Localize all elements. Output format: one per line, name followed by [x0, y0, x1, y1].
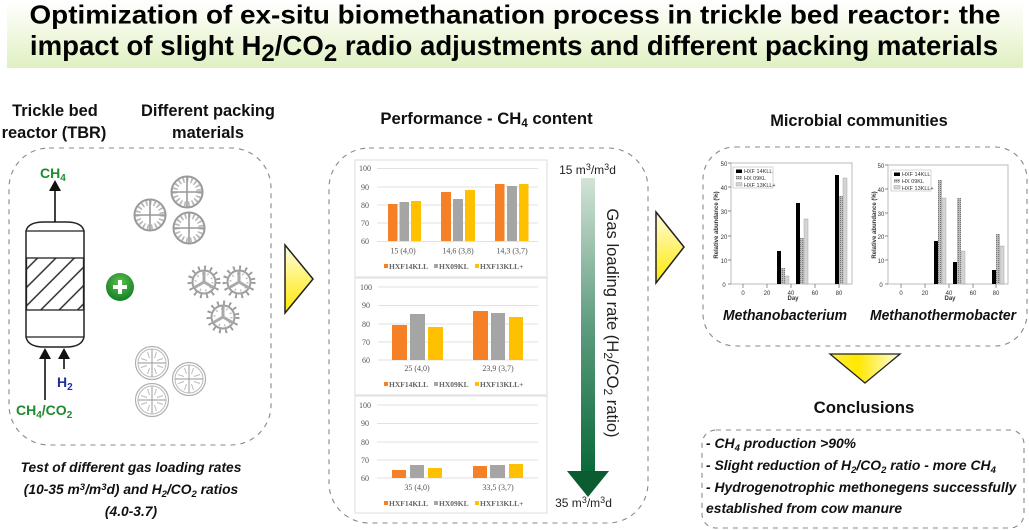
- bar chart: 15 m3/m3d: 15 (4,0): [390, 246, 416, 256]
- text: test description: /m: [84, 482, 101, 497]
- text: test description: ratios: [197, 482, 239, 497]
- label: Methanobacterium: Methanobacterium: [723, 307, 847, 324]
- label: H2 in: H: [57, 374, 67, 390]
- bar chart: 25 m3/m3d: HX09KL: [439, 380, 469, 389]
- label: gas loading rate axis: Gas loading rate (H: [603, 208, 622, 352]
- bar chart: Methanothermobacter: HXF 13KLL+: [902, 186, 934, 192]
- icon: trickle bed reactor: [26, 180, 84, 400]
- bar chart: 35 m3/m3d: HX09KL: [439, 499, 469, 508]
- text: test description: 3: [80, 482, 86, 493]
- title banner: /CO: [275, 30, 324, 61]
- label: CH4/CO2 in: /CO: [42, 402, 67, 418]
- bar chart: 25 m3/m3d: 60: [362, 356, 370, 365]
- heading: conclusions: Conclusions: [814, 398, 914, 417]
- arrow: to performance: [285, 245, 313, 313]
- text: test description: (4.0-3.7): [105, 504, 157, 519]
- conclusion: methanogens: - Hydrogenotrophic methonegens successfully: [706, 479, 1016, 495]
- bar chart: 35 m3/m3d: [355, 396, 547, 513]
- bar chart: Methanothermobacter: 0: [899, 291, 903, 297]
- bar chart: Methanobacterium: 0: [722, 283, 726, 289]
- conclusion: ratio: 2: [880, 465, 887, 476]
- bar chart: 35 m3/m3d: HXF14KLL: [389, 499, 428, 508]
- label: CH4/CO2 in: 2: [67, 410, 73, 421]
- bar chart: 15 m3/m3d: [355, 160, 547, 277]
- bar chart: 35 m3/m3d: 33,5 (3,7): [482, 483, 514, 492]
- text: test description: 2: [161, 489, 168, 500]
- bar chart: 35 m3/m3d: 35 (4,0): [404, 483, 430, 492]
- panel: reactor and packing: [9, 148, 271, 445]
- bar chart: 35 m3/m3d: 60: [361, 474, 369, 483]
- bar chart: Methanothermobacter: 40: [946, 291, 953, 297]
- text: test description: 2: [190, 489, 198, 500]
- bar chart: Methanobacterium: HX 09KL: [744, 176, 766, 182]
- bar chart: Methanobacterium: 30: [721, 210, 728, 216]
- icon: packing material A: [134, 176, 204, 244]
- bar chart: 35 m3/m3d: HXF13KLL+: [480, 499, 523, 508]
- label: 35 m3/m3d: 3: [600, 495, 605, 505]
- arrow: to conclusions: [830, 354, 900, 383]
- bar chart: 25 m3/m3d: 25 (4,0): [404, 364, 430, 373]
- bar chart: Methanobacterium: 50: [721, 162, 728, 168]
- arrow: gas loading rate gradient: [567, 178, 609, 497]
- bar chart: Methanobacterium: 10: [721, 259, 728, 265]
- bar chart: 15 m3/m3d: 14,6 (3,8): [442, 246, 474, 256]
- bar chart: Methanothermobacter: Relative abundance (%): [872, 191, 878, 259]
- bar chart: Methanobacterium: 40: [788, 291, 795, 297]
- label: Methanothermobacter: Methanothermobacter: [870, 307, 1017, 324]
- title banner: radio adjustments and different packing materials: [337, 30, 998, 61]
- title banner: [7, 0, 1023, 68]
- conclusion: production: - CH: [706, 435, 735, 451]
- heading: trickle bed reactor: Trickle bed: [12, 102, 98, 120]
- bar chart: Methanothermobacter: 80: [993, 291, 1000, 297]
- label: gas loading rate axis: 2: [601, 352, 615, 359]
- label: 35 m3/m3d: 35 m: [555, 496, 582, 510]
- heading: different packing materials: Different packing: [141, 102, 275, 120]
- bar chart: 25 m3/m3d: HXF13KLL+: [480, 380, 523, 389]
- bar chart: 15 m3/m3d: 60: [361, 237, 369, 246]
- bar chart: Methanobacterium: 20: [764, 291, 771, 297]
- bar chart: Methanothermobacter: [872, 164, 1008, 302]
- bar chart: 25 m3/m3d: 70: [362, 338, 370, 347]
- bar chart: Methanobacterium: 60: [812, 291, 819, 297]
- icon: plus: [106, 273, 134, 301]
- bar chart: Methanothermobacter: 50: [878, 164, 885, 170]
- bar chart: 15 m3/m3d: 70: [361, 219, 369, 228]
- label: 15 m3/m3d: /m: [591, 163, 604, 177]
- label: gas loading rate axis: /CO: [603, 359, 622, 389]
- label: 15 m3/m3d: 3: [604, 162, 609, 172]
- panel: performance CH4 content: [329, 148, 648, 523]
- text: test description: Test of different gas loading rates: [21, 460, 242, 475]
- bar chart: 35 m3/m3d: 70: [361, 456, 369, 465]
- bar chart: Methanobacterium: 80: [836, 291, 843, 297]
- bar chart: Methanobacterium: 40: [721, 186, 728, 192]
- bar chart: 15 m3/m3d: 14,3 (3,7): [496, 246, 528, 256]
- title banner: Optimization of ex-situ biomethanation process in trickle bed reactor: the: [30, 0, 1001, 30]
- heading: microbial communities: Microbial communities: [770, 112, 948, 130]
- heading: trickle bed reactor: reactor (TBR): [2, 124, 106, 142]
- bar chart: 15 m3/m3d: 100: [359, 164, 371, 173]
- arrow: to microbial communities: [656, 212, 684, 283]
- bar chart: 25 m3/m3d: 23,9 (3,7): [482, 364, 514, 373]
- label: 35 m3/m3d: d: [605, 496, 612, 510]
- text: test description: [21, 460, 242, 519]
- icon: packing material B: [190, 268, 253, 331]
- bar chart: Methanobacterium: HXF 13KLL+: [744, 183, 776, 189]
- conclusion: ratio: ratio - more CH: [886, 457, 992, 473]
- bar chart: Methanothermobacter: 0: [879, 283, 883, 289]
- label: 15 m3/m3d: 15 m: [559, 163, 586, 177]
- bar chart: Methanothermobacter: 20: [922, 291, 929, 297]
- conclusion: ratio: 4: [990, 465, 997, 476]
- conclusion: methanogens: established from cow manure: [706, 500, 902, 516]
- bar chart: Methanobacterium: 20: [721, 235, 728, 241]
- bar chart: 25 m3/m3d: HXF14KLL: [389, 380, 428, 389]
- label: 15 m3/m3d: 3: [586, 162, 591, 172]
- label: 15 m3/m3d: d: [609, 163, 616, 177]
- bar chart: Methanothermobacter: HX 09KL: [902, 179, 924, 185]
- text: test description: (10-35 m: [24, 482, 80, 497]
- label: CH4 out: 4: [60, 173, 66, 184]
- heading: performance: Performance - CH: [380, 109, 521, 128]
- bar chart: 25 m3/m3d: [355, 278, 547, 395]
- panel: conclusions: [702, 430, 1024, 528]
- title banner: 2: [324, 40, 337, 67]
- label: CH4 out: CH: [40, 165, 60, 181]
- conclusion: ratio: - Slight reduction of H: [706, 457, 851, 473]
- bar chart: Methanobacterium: HXF 14KLL: [744, 169, 772, 175]
- label: gas loading rate axis: ratio): [603, 395, 622, 438]
- bar chart: 15 m3/m3d: HXF14KLL: [389, 262, 428, 271]
- bar chart: Methanobacterium: Day: [787, 296, 799, 302]
- text: test description: 3: [101, 482, 107, 493]
- bar chart: 15 m3/m3d: 90: [361, 183, 369, 192]
- bar chart: Methanothermobacter: 40: [878, 188, 885, 194]
- label: H2 in: 2: [67, 382, 73, 393]
- bar chart: 25 m3/m3d: 100: [360, 283, 372, 292]
- bar chart: 25 m3/m3d: 90: [362, 301, 370, 310]
- bar chart: Methanothermobacter: 30: [878, 212, 885, 218]
- heading: performance: 4: [521, 118, 528, 130]
- label: CH4/CO2 in: 4: [36, 410, 42, 421]
- conclusion: ratio: 2: [850, 465, 857, 476]
- bar chart: Methanothermobacter: 20: [878, 235, 885, 241]
- text: test description: d) and H: [106, 482, 163, 497]
- bar chart: 25 m3/m3d: 80: [362, 320, 370, 329]
- bar chart: 15 m3/m3d: HXF13KLL+: [480, 262, 523, 271]
- bar chart: Methanothermobacter: HXF 14KLL: [902, 172, 930, 178]
- bar chart: 35 m3/m3d: 90: [361, 419, 369, 428]
- bar chart: 15 m3/m3d: 80: [361, 201, 369, 210]
- bar chart: Methanothermobacter: 60: [970, 291, 977, 297]
- conclusion: production: production >90%: [740, 435, 856, 451]
- label: 35 m3/m3d: /m: [587, 496, 600, 510]
- label: 35 m3/m3d: 3: [582, 495, 587, 505]
- conclusion: ratio: /CO: [855, 457, 881, 473]
- bar chart: Methanobacterium: 0: [741, 291, 745, 297]
- panel: microbial communities: [703, 147, 1027, 346]
- title banner: impact of slight H: [30, 30, 261, 61]
- icon: packing material C: [136, 346, 206, 416]
- title banner: 2: [261, 40, 275, 67]
- label: gas loading rate axis: 2: [601, 388, 615, 395]
- bar chart: 15 m3/m3d: HX09KL: [439, 262, 469, 271]
- bar chart: 35 m3/m3d: 80: [361, 438, 369, 447]
- bar chart: Methanobacterium: Relative abundance (%): [714, 191, 720, 259]
- bar chart: 35 m3/m3d: 100: [359, 401, 371, 410]
- bar chart: Methanothermobacter: 10: [878, 259, 885, 265]
- bar chart: Methanothermobacter: Day: [944, 296, 956, 302]
- bar chart: Methanobacterium: [714, 162, 852, 302]
- heading: performance: content: [528, 109, 593, 128]
- conclusion: production: 4: [734, 443, 741, 454]
- heading: different packing materials: materials: [172, 124, 244, 142]
- text: test description: /CO: [166, 482, 192, 497]
- label: CH4/CO2 in: CH: [16, 402, 36, 418]
